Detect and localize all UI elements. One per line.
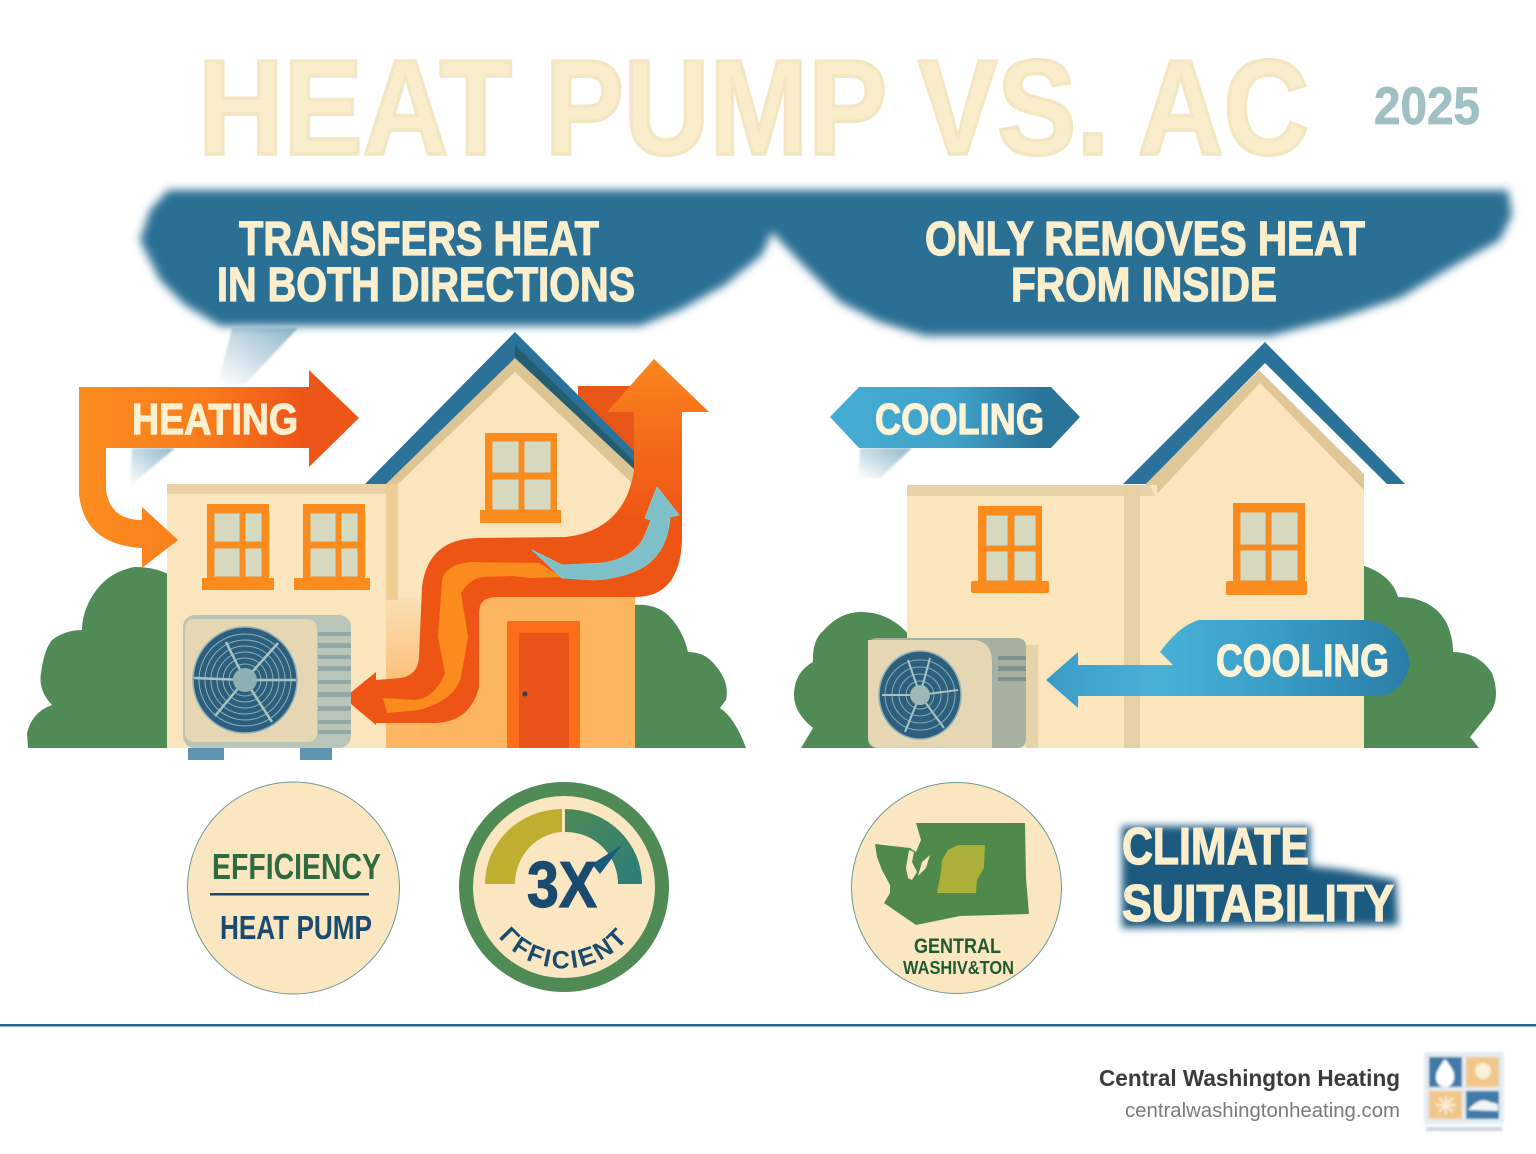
roof: [1123, 342, 1405, 484]
cooling sign: [830, 387, 1080, 448]
3X label: 3X: [527, 848, 597, 921]
wing window 1: [202, 504, 274, 590]
efficient arc label: ΓFFICIENT: [499, 926, 624, 969]
title: HEAT PUMP VS. AC: [198, 32, 1309, 183]
gable wall: [1146, 370, 1364, 748]
efficiency label: EFFICIENCY: [212, 846, 381, 887]
fan: [879, 651, 961, 739]
banner tail fades: [130, 328, 912, 486]
cooling label: COOLING: [1216, 635, 1389, 686]
chimney: [578, 386, 636, 476]
puget sound: [906, 850, 930, 880]
footer logo: [1424, 1052, 1504, 1131]
right heading: [925, 213, 1365, 312]
blue return swoosh: [532, 487, 679, 580]
illustration: AC house: [794, 342, 1496, 748]
gauge needle: [592, 845, 622, 874]
banner shape: [140, 190, 1512, 336]
gauge right segment: [565, 809, 642, 884]
footer brand text: [1099, 1065, 1400, 1122]
outdoor unit: [868, 638, 1038, 748]
wing wall: [907, 485, 1157, 748]
heating arrow: [79, 370, 359, 568]
outdoor unit: [183, 615, 351, 748]
climate suitability label: CLIMATE: [1122, 818, 1309, 876]
climate suitability label: SUITABILITY: [1122, 875, 1394, 933]
year label: 2025: [1374, 77, 1480, 136]
lower gable orange: [420, 597, 635, 748]
wing wall: [167, 484, 386, 748]
left window: [971, 506, 1049, 593]
right heading: ONLY REMOVES HEAT: [925, 213, 1365, 266]
roof: [365, 332, 635, 492]
left bush: [794, 612, 910, 748]
banner: headings: [140, 190, 1512, 336]
climate suitability label: [1122, 818, 1398, 933]
cooling sign label: COOLING: [875, 395, 1044, 444]
cooling arrow to outdoor unit: [1046, 620, 1410, 708]
footer rule: [0, 1024, 1536, 1026]
region labels: GENTRAL: [914, 935, 1001, 958]
badge: central Washington map: [852, 782, 1062, 994]
right bush: [632, 605, 746, 748]
badge: 3X efficient gauge: [459, 782, 669, 992]
door: [507, 621, 580, 748]
right bush: [1362, 565, 1496, 748]
heating label: HEATING: [132, 395, 298, 444]
footer brand text: Central Washington Heating: [1099, 1065, 1400, 1091]
wing window 2: [294, 504, 370, 590]
left heading: IN BOTH DIRECTIONS: [217, 259, 635, 312]
illustration: heat pump house: [27, 332, 746, 760]
badge: central Washington map: WASHIV&TON: [903, 958, 1014, 978]
central region: [937, 845, 985, 893]
badge: efficiency heat pump: [188, 782, 400, 994]
heat pump label: HEAT PUMP: [220, 909, 372, 946]
right window: [1226, 503, 1307, 595]
outdoor unit feet: [188, 748, 332, 760]
left bush: [27, 567, 170, 748]
inner orange flow: [383, 562, 562, 713]
upper window: [480, 433, 561, 523]
left heading: [217, 213, 635, 312]
heat flow arrow: [344, 359, 709, 725]
left heading: TRANSFERS HEAT: [239, 213, 599, 266]
right heading: FROM INSIDE: [1011, 259, 1277, 312]
fan: [193, 627, 297, 733]
gable wall: [386, 358, 635, 748]
gauge left segment: [485, 809, 562, 884]
footer brand text: centralwashingtonheating.com: [1125, 1100, 1400, 1122]
Washington state map: [875, 823, 1029, 925]
